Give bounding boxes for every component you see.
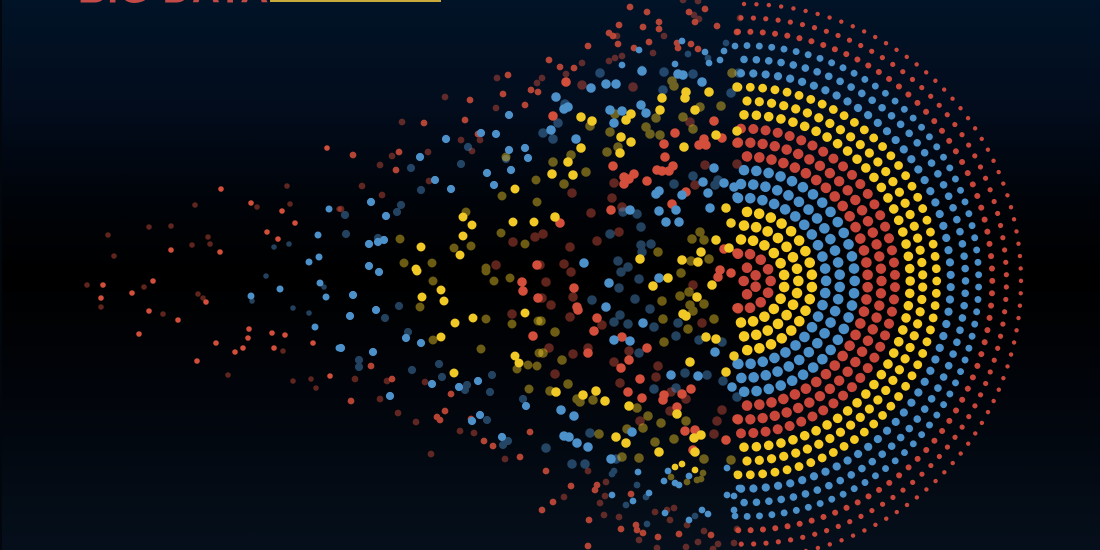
scattered particles: left tail, smallest red and blue dots [87,148,339,388]
ring band: outer yellow [738,87,937,475]
ring band: outer blue [741,46,979,516]
ring band: inner red [738,253,771,309]
scattered particles: dense large dots near the semicircle [496,71,739,464]
scattered particles: middle field [341,115,539,445]
ring band: inner yellow [741,212,812,350]
title: gold bar [270,0,441,2]
concentric dot semicircle [738,4,1021,550]
ring band: middle red [738,129,895,433]
ring band: inner blue [738,170,855,392]
scattered particles: small dots at the top and bottom fringe [341,0,740,549]
ring band: outer red [738,4,1021,550]
